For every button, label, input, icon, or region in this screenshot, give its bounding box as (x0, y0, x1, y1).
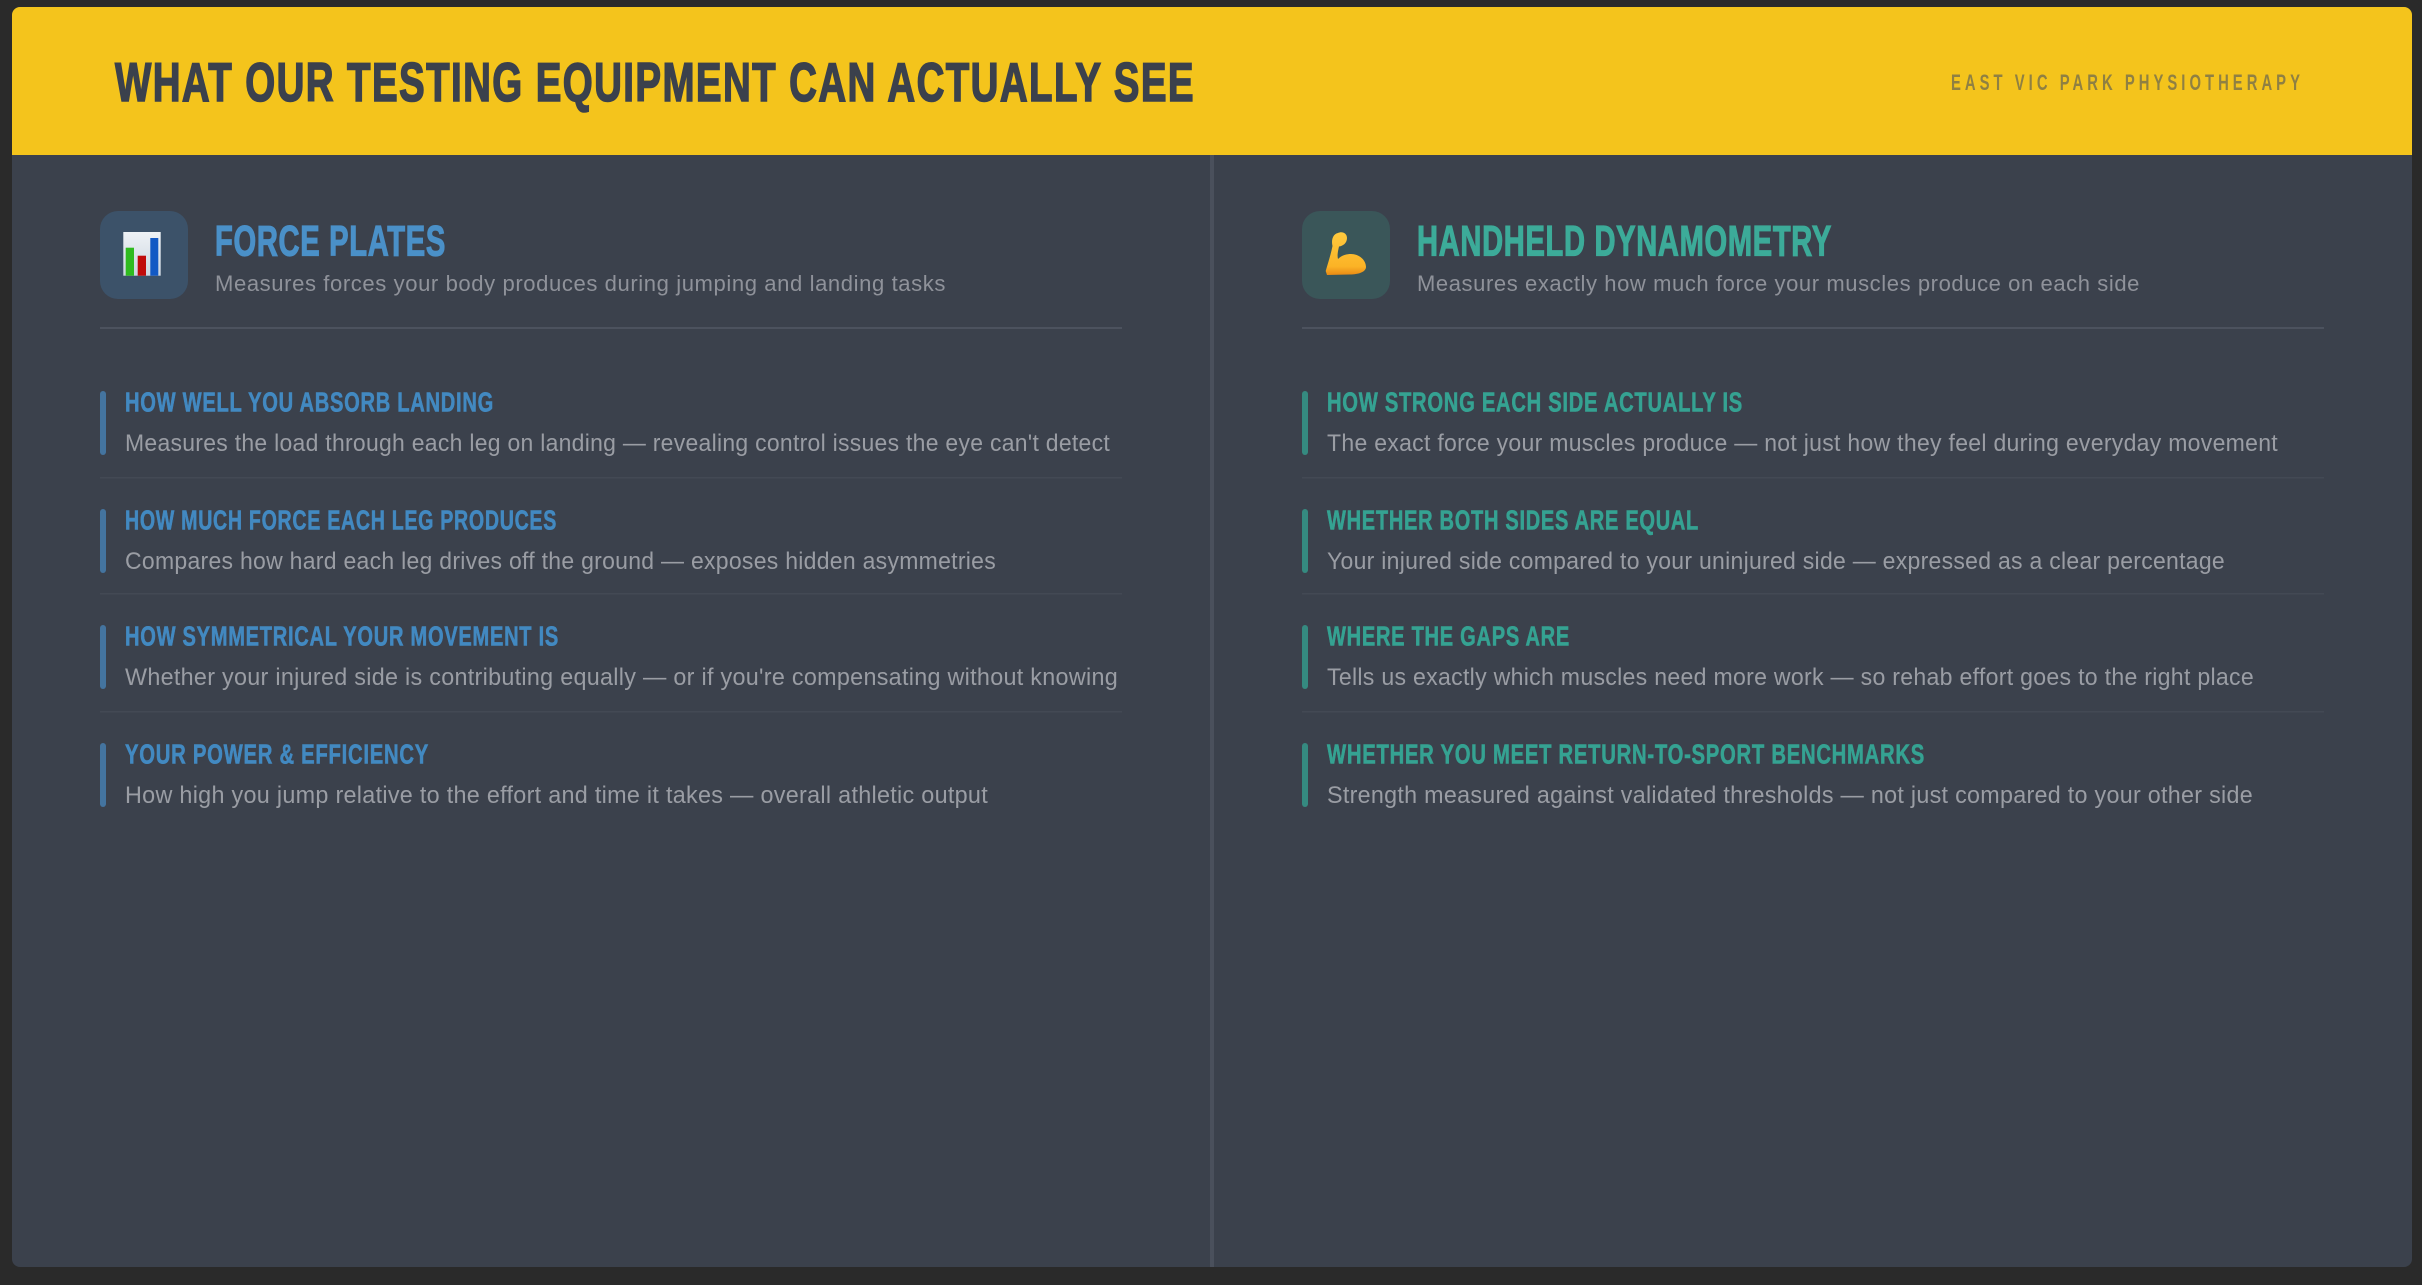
item: symmetry: HOW SYMMETRICAL YOUR MOVEMENT IS (125, 620, 559, 652)
item: benchmarks: WHETHER YOU MEET RETURN-TO-SPORT BENCHMARKS (1327, 738, 1925, 770)
item: force each leg: Compares how hard each leg drives off the ground — exposes hidden asymmetries (125, 548, 996, 575)
centre divider (1210, 155, 1214, 1267)
item: gaps: WHERE THE GAPS ARE (1327, 620, 1570, 652)
item: power: How high you jump relative to the effort and time it takes — overall athletic output (125, 782, 988, 809)
item: benchmarks (1302, 738, 2253, 809)
item: sides equal: WHETHER BOTH SIDES ARE EQUAL (1327, 504, 1699, 536)
item: absorb landing (100, 386, 1110, 457)
icon: bar chart (100, 211, 188, 299)
item: sides equal (1302, 504, 2225, 575)
handheld dynamometry heading: HANDHELD DYNAMOMETRY (1417, 218, 1832, 266)
item: power (100, 738, 988, 809)
panel: force plates (100, 211, 1122, 809)
item: symmetry: Whether your injured side is contributing equally — or if you're compensating without knowing (125, 664, 1118, 691)
item: force each leg (100, 504, 996, 575)
item: gaps (1302, 620, 2254, 691)
item: strength each side: The exact force your muscles produce — not just how they feel during everyday movement (1327, 430, 2278, 457)
item: absorb landing: Measures the load through each leg on landing — revealing control issues the eye can't detect (125, 430, 1110, 457)
item: benchmarks: Strength measured against validated thresholds — not just compared to your other side (1327, 782, 2253, 809)
handheld dynamometry subtitle: Measures exactly how much force your muscles produce on each side (1417, 271, 2140, 296)
item: gaps: Tells us exactly which muscles need more work — so rehab effort goes to the right place (1327, 664, 2254, 691)
header banner (12, 7, 2412, 155)
item: power: YOUR POWER & EFFICIENCY (125, 738, 429, 770)
icon: flexed bicep (1302, 211, 1390, 299)
item: force each leg: HOW MUCH FORCE EACH LEG PRODUCES (125, 504, 557, 536)
panel: handheld dynamometry (1302, 211, 2324, 809)
title: WHAT OUR TESTING EQUIPMENT CAN ACTUALLY SEE (115, 51, 1195, 113)
item: strength each side: HOW STRONG EACH SIDE ACTUALLY IS (1327, 386, 1743, 418)
item: strength each side (1302, 386, 2278, 457)
item: absorb landing: HOW WELL YOU ABSORB LANDING (125, 386, 494, 418)
item: symmetry (100, 620, 1118, 691)
force plates heading: FORCE PLATES (215, 218, 446, 266)
force plates subtitle: Measures forces your body produces during jumping and landing tasks (215, 271, 946, 296)
item: sides equal: Your injured side compared to your uninjured side — expressed as a clear percentage (1327, 548, 2225, 575)
